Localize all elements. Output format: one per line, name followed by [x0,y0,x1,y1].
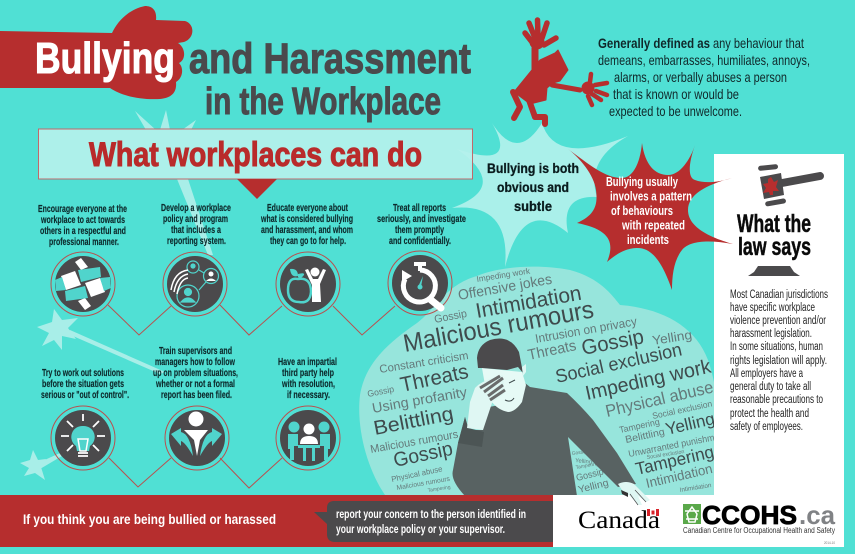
word cloud text: Physical abuse [604,378,715,421]
word cloud text: Unwarranted punishment [627,430,728,459]
step 7: impartial third party: with resolution, [281,378,335,390]
word cloud text: Tampering [633,441,716,479]
step 6: train supervisors: Train supervisors and [159,345,232,357]
word cloud text: Intrusion on privacy [534,314,639,346]
law body text: have specific workplace [730,302,815,314]
word cloud text: Gossip [391,438,455,472]
definition text: any behaviour that [713,35,804,51]
word cloud text: Tampering [575,461,599,471]
step 6: train supervisors [153,345,238,470]
step 3: educate everyone: Educate everyone about [267,202,348,214]
red burst: pattern of behaviours [568,143,733,290]
definition text: that is known or would be [613,86,739,102]
step 5: try to work out solutions: serious or "out of control". [41,389,129,401]
red burst: pattern of behaviours: with repeated [621,218,685,232]
footer callout bubble [314,501,560,542]
zigzag connector lines [108,305,395,488]
word cloud text: Gossip [575,466,605,484]
law body text: protect the health and [730,408,809,420]
definition text: alarms, or verbally abuses a person [614,69,787,85]
red burst: pattern of behaviours: Bullying usually [606,175,678,189]
word cloud text: Threats [526,337,578,364]
law body text [730,289,828,433]
step 5: try to work out solutions [41,367,129,470]
word cloud text: Intimidation [644,461,714,491]
step 7: impartial third party: Have an impartial [278,356,337,368]
word cloud text: Offensive jokes [457,272,553,304]
red burst: pattern of behaviours: incidents [627,233,669,247]
heading: what the law says [737,210,811,261]
step 4: treat reports seriously: seriously, and investigate [377,213,466,225]
icon: apple and raised arms person [288,268,326,302]
definition text: Generally defined as [598,35,710,51]
logo: CCOHS.ca: CCOHS [702,500,797,530]
word cloud text: Malicious rumours [396,476,451,492]
speech burst: bullying is both obvious and subtle [452,123,628,267]
icon: stopwatch and magnifier [402,262,441,308]
red burst: pattern of behaviours: of behaviours [611,204,673,218]
logo: CCOHS.ca: .ca [799,500,836,530]
icon: light bulb [61,414,105,456]
step 5: try to work out solutions: Try to work out solutions [42,367,124,379]
heading: what the law says: What the [737,210,811,238]
step 1: encourage respect [38,203,127,316]
word cloud text: Physical abuse [391,464,444,484]
word cloud text: Impeding work [583,355,714,405]
step 2: develop policy: policy and program [163,213,228,225]
title: and Harassment [189,35,471,83]
word cloud text: Gossip [366,384,395,399]
word cloud text: Gossip [571,449,587,457]
heading: what the law says: law says [738,233,811,261]
title: in the Workplace [205,81,441,123]
illustration: man's hand resting on footer [618,482,650,505]
step 5: try to work out solutions: before the situation gets [42,378,124,390]
word cloud text: Social exclusion [646,449,685,461]
word cloud text: Social exclusion [651,398,713,421]
step 1: encourage respect: Encourage everyone at the [38,203,127,215]
footer logos panel [553,495,844,547]
step 2: develop policy: reporting system. [167,235,226,247]
step 2: develop policy: that includes a [171,224,221,236]
step 6: train supervisors: whether or not a formal [155,378,235,390]
speech burst: bullying is both obvious and subtle: Bullying is both [487,160,579,176]
definition text: expected to be unwelcome. [609,103,742,119]
step 2: develop policy: Develop a workplace [161,202,231,214]
speech burst: bullying is both obvious and subtle: subtle [514,198,552,214]
step 1: encourage respect: others in a respectful and [40,225,126,237]
word cloud text: Malicious rumours [401,296,596,358]
word cloud text: Threats [398,360,471,397]
step 3: educate everyone [260,202,353,316]
footer bar: concern message [0,495,553,547]
law body text: All employers have a [730,368,803,380]
step 7: impartial third party: if necessary. [287,389,330,401]
title [35,34,471,123]
step 7: impartial third party: third party help [282,367,334,379]
title: Bullying [35,34,175,83]
word cloud text: Gossip [580,325,646,360]
fist pointing at title [0,6,192,99]
speech burst: bullying is both obvious and subtle: obvious and [497,179,569,195]
word cloud text: Intimidation [474,282,583,323]
step 4: treat reports seriously: Treat all reports [393,202,446,214]
step 3: educate everyone: what is considered bullying [260,213,353,225]
word cloud text: Yelling [575,458,592,466]
word cloud blob [359,267,719,495]
step 3: educate everyone: they can go to for help. [270,235,346,247]
logo: CCOHS.ca: 2014-10 [824,541,835,545]
word cloud text [366,266,728,496]
logo: Canada wordmark: Canada [578,507,660,534]
step 1: encourage respect: workplace to act towards [40,214,125,226]
step 3: educate everyone: and harassment, and whom [261,224,353,236]
heading panel: what workplaces can do: What workplaces can do [89,136,422,174]
word cloud text: Impeding work [476,266,531,284]
step 2: develop policy [161,202,231,316]
icon: gavel [748,164,820,276]
decorative burst rays behind heading panel [20,110,213,480]
icon: person with diverging arrows [171,412,222,456]
word cloud text: Yelling [651,327,693,348]
step 4: treat reports seriously [377,202,466,315]
icon: tumbling figure [513,20,607,124]
red burst: pattern of behaviours: involves a pattern [610,190,692,204]
footer bar: concern message: If you think you are being bullied or harassed [23,511,276,527]
icon: people network [171,261,218,307]
law body text: general duty to take all [730,381,811,393]
word cloud text: Yelling [577,478,610,496]
word cloud text: Using profanity [371,384,468,416]
icon: joined hands [55,258,111,310]
word cloud text: Social exclusion [553,338,684,387]
step 4: treat reports seriously: them promptly [395,224,444,236]
law body text: safety of employees. [730,421,803,433]
law body text: harassment legislation. [730,328,812,340]
step 4: treat reports seriously: and confidentially. [389,235,451,247]
word cloud text: Malicious rumours [369,429,460,456]
word cloud text: Tampering [618,417,661,435]
heading panel: what workplaces can do [38,129,472,199]
step 7: impartial third party [276,356,340,470]
step 6: train supervisors: up on problem situations, [153,367,238,379]
word cloud text: Intimidation [679,482,712,494]
word cloud text: Gossip [433,308,468,326]
step 6: train supervisors: report has been filed. [161,389,232,401]
word cloud text: Constant criticism [379,350,469,376]
footer callout bubble: report your concern to the person identified in [336,507,526,521]
word cloud text: Yelling [664,409,717,439]
word cloud text: Tampering [427,484,451,494]
panel: what the law says [714,154,844,495]
footer callout bubble: your workplace policy or your supervisor. [336,522,505,536]
illustration: stressed man [452,338,636,496]
step 6: train supervisors: managers how to follow [155,356,236,368]
word cloud text: Belittling [624,427,666,446]
word cloud text: Belittling [372,403,455,440]
logo: CCOHS.ca [683,500,836,545]
definition text [598,35,810,119]
step 1: encourage respect: professional manner. [49,236,119,248]
icon: mediation at table [288,422,330,461]
